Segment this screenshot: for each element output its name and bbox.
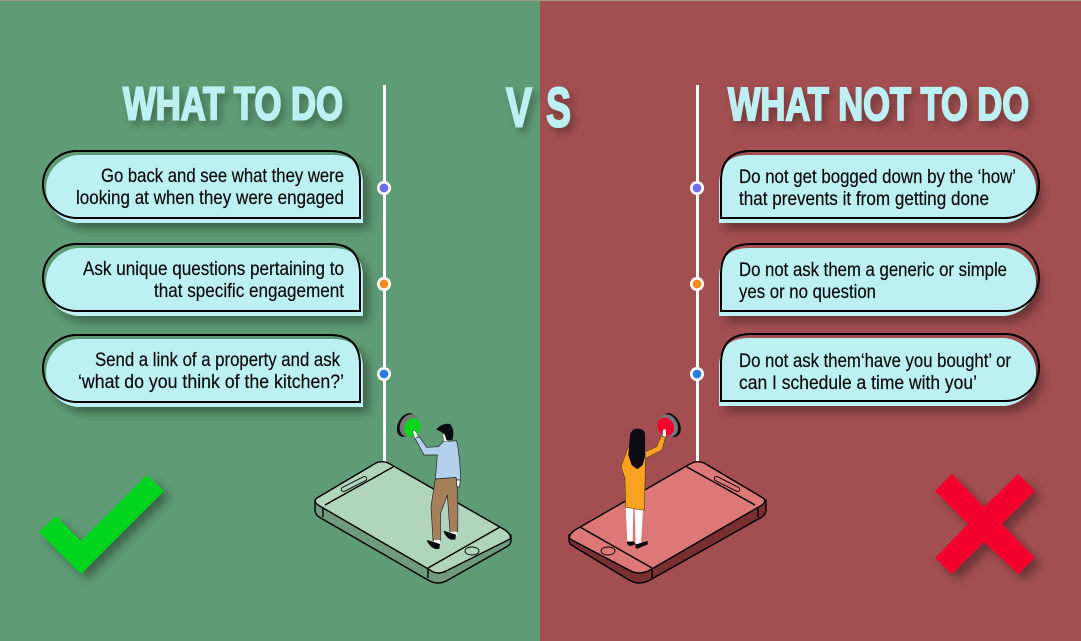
icon: red button xyxy=(654,410,685,440)
timeline: left xyxy=(377,85,391,463)
callout: unique questions: Ask unique questions pertaining to xyxy=(83,258,344,280)
callout: bogged down: that prevents it from getting done xyxy=(739,188,989,210)
callout: have you bought: can I schedule a time with you’ xyxy=(739,372,977,394)
heading: versus: V xyxy=(506,76,532,138)
panel: what to do background xyxy=(0,0,540,641)
callout: generic question xyxy=(719,244,1039,316)
callout: go back: Go back and see what they were xyxy=(101,165,344,187)
heading: versus: S xyxy=(546,76,571,138)
illustration: woman pressing red button xyxy=(621,410,685,549)
callout: go back xyxy=(43,151,363,223)
callout: send a link xyxy=(43,335,363,407)
illustration: left phone xyxy=(315,462,511,583)
callout: generic question: Do not ask them a generic or simple xyxy=(739,259,1007,281)
callout: bogged down: Do not get bogged down by the ‘how’ xyxy=(739,166,1016,188)
callout: unique questions xyxy=(43,244,363,316)
heading: versus xyxy=(506,76,571,138)
icon: red cross xyxy=(935,474,1035,574)
timeline: right xyxy=(690,85,704,463)
illustration: right phone xyxy=(569,462,766,583)
callout: bogged down xyxy=(719,151,1039,223)
illustration: man pressing green button xyxy=(393,410,461,549)
icon: green check mark xyxy=(39,475,164,574)
callout: send a link: ‘what do you think of the kitchen?’ xyxy=(78,371,344,393)
callout: go back: looking at when they were engaged xyxy=(76,187,344,209)
panel: what not to do background xyxy=(540,0,1081,641)
callout: send a link: Send a link of a property and ask xyxy=(95,349,340,371)
heading: what to do: WHAT TO DO xyxy=(123,78,343,130)
callout: have you bought xyxy=(719,334,1039,406)
callout: unique questions: that specific engagement xyxy=(154,280,345,302)
callout: have you bought: Do not ask them‘have you bought’ or xyxy=(739,350,1011,372)
callout: generic question: yes or no question xyxy=(739,281,876,303)
icon: green button xyxy=(393,410,424,440)
